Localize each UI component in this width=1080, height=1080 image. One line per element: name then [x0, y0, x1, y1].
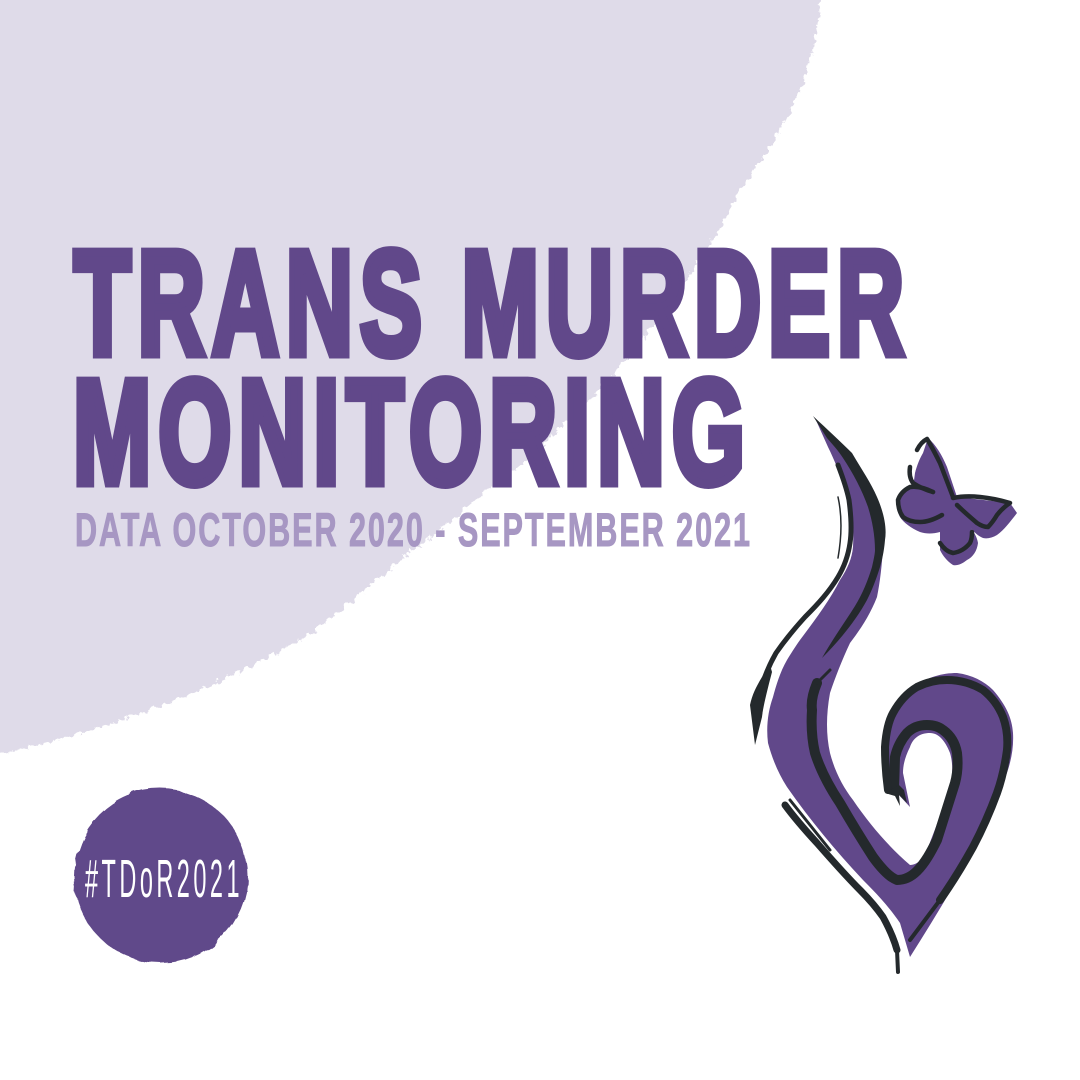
title: [73, 221, 911, 515]
butterfly outlines: [898, 439, 1010, 553]
ribbon purple body: [767, 418, 1013, 957]
background brush blob: [0, 0, 820, 757]
icon: heart ribbon with butterfly: [750, 416, 1017, 972]
hashtag badge: [74, 789, 248, 963]
text: #TDoR2021: [85, 849, 243, 909]
butterfly: [897, 438, 1017, 565]
butterfly wings: [897, 438, 1017, 565]
ribbon dark outlines: [750, 416, 1007, 972]
